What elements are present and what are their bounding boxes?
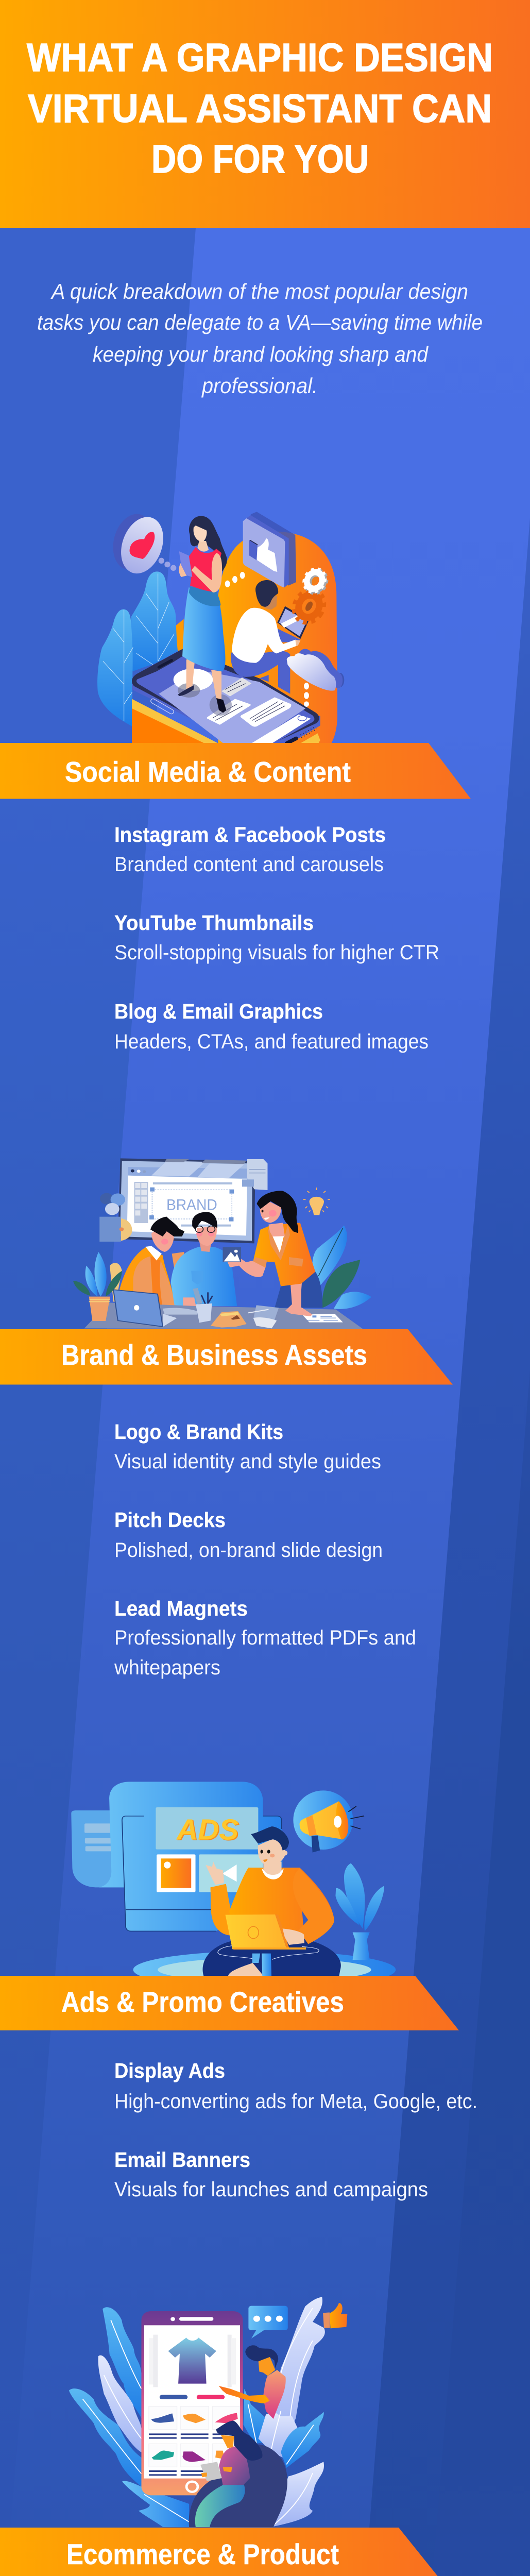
task: YouTube thumbnails: Scroll-stopping visuals for higher CTR xyxy=(114,941,439,964)
section banner xyxy=(0,2528,443,2576)
intro text: A quick breakdown of the most popular design xyxy=(50,279,468,303)
intro text: keeping your brand looking sharp and xyxy=(93,342,429,366)
panel: social media and content xyxy=(0,510,471,1053)
task: YouTube thumbnails xyxy=(114,911,439,964)
task: lead magnets: Lead Magnets xyxy=(114,1597,248,1620)
title: WHAT A GRAPHIC DESIGN xyxy=(27,36,493,80)
task list xyxy=(114,2059,477,2201)
task: display ads: Display Ads xyxy=(114,2059,225,2082)
task: logo and brand kits xyxy=(114,1420,381,1473)
title: DO FOR YOU xyxy=(151,137,369,181)
intro text: tasks you can delegate to a VA—saving time while xyxy=(37,310,483,334)
task: email banners xyxy=(114,2148,428,2201)
section heading: Ads & Promo Creatives xyxy=(61,1986,344,2018)
task: lead magnets: whitepapers xyxy=(114,1656,220,1679)
task: blog and email graphics: Headers, CTAs, and featured images xyxy=(114,1030,429,1053)
task: email banners: Email Banners xyxy=(114,2148,250,2172)
task list xyxy=(114,1420,416,1679)
ADS label: ADS xyxy=(176,1813,238,1846)
title xyxy=(27,36,493,181)
task: blog and email graphics xyxy=(114,999,429,1053)
task: Instagram and Facebook posts: Instagram & Facebook Posts xyxy=(114,823,386,846)
section heading: Brand & Business Assets xyxy=(61,1338,367,1371)
task: pitch decks xyxy=(114,1508,383,1562)
task: pitch decks: Polished, on-brand slide design xyxy=(114,1539,383,1562)
task: lead magnets xyxy=(114,1597,416,1679)
section banner xyxy=(0,1329,453,1385)
header band with title xyxy=(0,0,530,228)
section banner xyxy=(0,743,471,799)
task list xyxy=(114,823,439,1053)
task: email banners: Visuals for launches and campaigns xyxy=(114,2178,428,2201)
task: blog and email graphics: Blog & Email Graphics xyxy=(114,999,323,1023)
illustration: woman and man on a phone with social icons xyxy=(97,510,344,743)
task: Instagram and Facebook posts xyxy=(114,823,386,876)
task: Instagram and Facebook posts: Branded content and carousels xyxy=(114,853,384,876)
task: display ads: High-converting ads for Meta, Google, etc. xyxy=(114,2090,477,2113)
illustration: shopping app on a phone with two people xyxy=(69,2297,347,2527)
task: lead magnets: Professionally formatted PDFs and xyxy=(114,1626,416,1649)
task: YouTube thumbnails: YouTube Thumbnails xyxy=(114,911,314,935)
intro text xyxy=(37,279,483,398)
illustration: team around a desk with a brand monitor xyxy=(73,1158,371,1329)
title: VIRTUAL ASSISTANT CAN xyxy=(28,87,492,131)
intro text: professional. xyxy=(201,374,318,398)
ADS label: ADS xyxy=(177,1814,240,1846)
task: logo and brand kits: Visual identity and style guides xyxy=(114,1450,381,1473)
panel: ecommerce and product xyxy=(0,2297,475,2576)
illustration: man with laptop in front of ad layout and megaphone xyxy=(71,1782,396,1989)
BRAND label on monitor: BRAND xyxy=(166,1196,217,1213)
task: display ads xyxy=(114,2059,477,2113)
section banner xyxy=(0,1976,459,2030)
section heading: Social Media & Content xyxy=(65,755,351,788)
section heading: Ecommerce & Product xyxy=(66,2538,339,2570)
panel: ads and promo creatives xyxy=(0,1782,477,2201)
panel: brand and business assets xyxy=(0,1158,453,1679)
task: logo and brand kits: Logo & Brand Kits xyxy=(114,1420,283,1444)
task: pitch decks: Pitch Decks xyxy=(114,1508,226,1532)
